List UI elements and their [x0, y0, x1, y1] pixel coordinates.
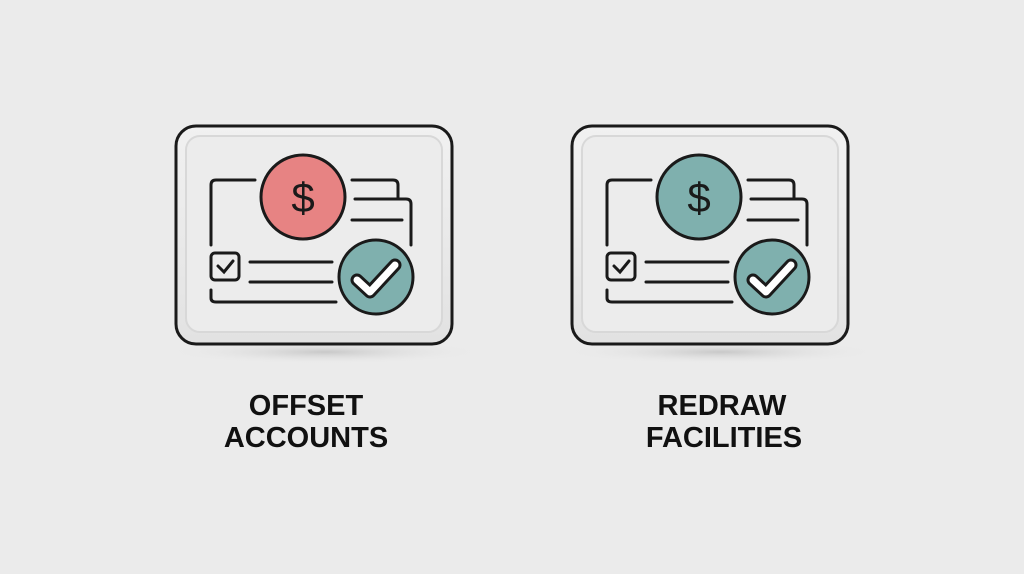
label: redraw facilities: REDRAW: [658, 390, 787, 422]
label: redraw facilities: [646, 390, 802, 454]
label: offset accounts: [224, 390, 388, 454]
label: offset accounts: OFFSET: [249, 390, 363, 422]
label: redraw facilities: FACILITIES: [646, 422, 802, 454]
icon: teal check badge: [339, 240, 413, 314]
icon: teal check badge: [735, 240, 809, 314]
document outline: [211, 180, 411, 302]
document outline: [607, 180, 807, 302]
panel: offset accounts card: [165, 126, 485, 364]
label: offset accounts: ACCOUNTS: [224, 422, 388, 454]
icon: teal dollar coin: $: [687, 174, 711, 221]
icon: teal dollar coin: [657, 155, 741, 239]
panel: redraw facilities card: [561, 126, 881, 364]
icon: red dollar coin: $: [291, 174, 315, 221]
icon: red dollar coin: [261, 155, 345, 239]
